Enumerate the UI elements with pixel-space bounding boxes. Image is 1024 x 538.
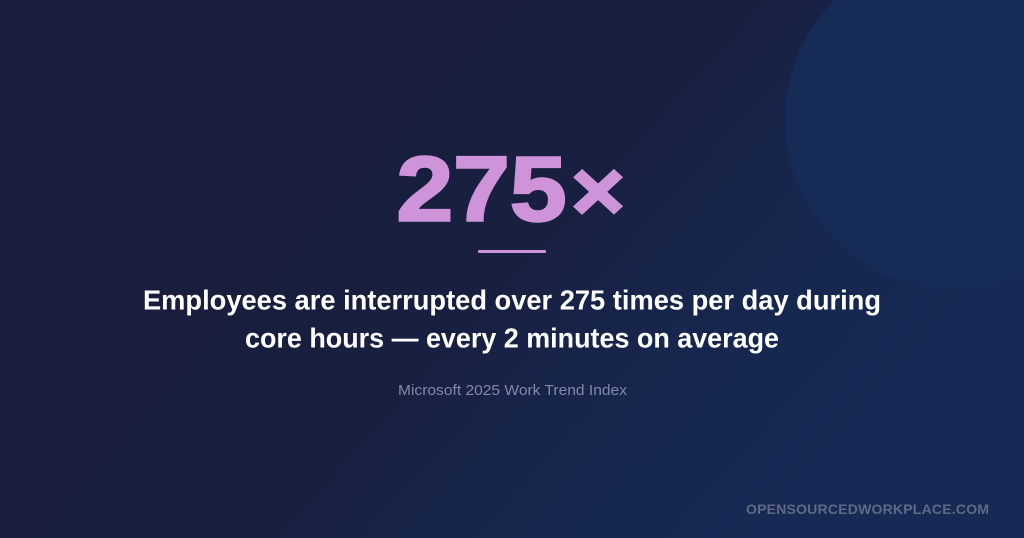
big stat: 275x: × <box>571 144 625 238</box>
accent divider <box>478 250 546 253</box>
decorative circle <box>785 0 1024 290</box>
headline: core hours — every 2 minutes on average <box>245 322 779 354</box>
big stat: 275x: 275 <box>396 138 566 240</box>
big stat: 275x <box>396 138 625 240</box>
website watermark: OPENSOURCEDWORKPLACE.COM <box>746 501 989 517</box>
headline <box>143 284 881 354</box>
headline: Employees are interrupted over 275 times per day during <box>143 284 881 316</box>
source line: Microsoft 2025 Work Trend Index <box>398 382 628 399</box>
